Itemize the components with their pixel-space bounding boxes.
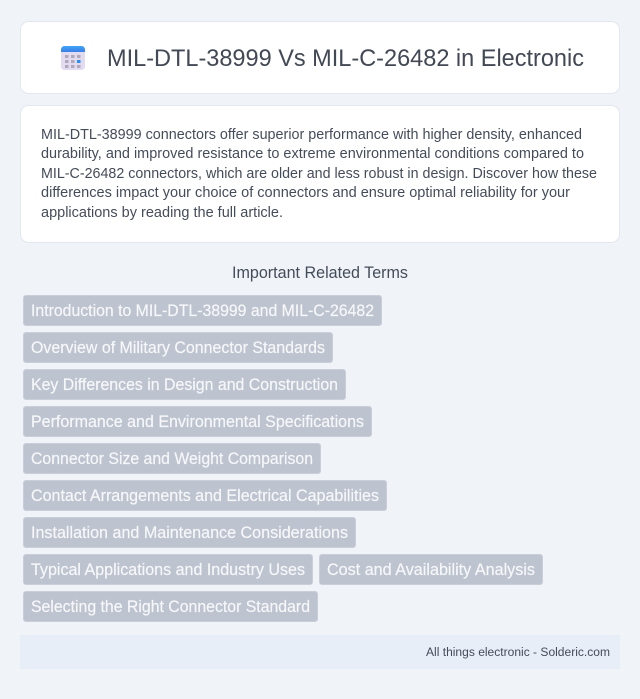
term tag: Overview of Military Connector Standards — [31, 339, 325, 357]
term tag — [24, 406, 372, 436]
summary text: applications by reading the full article. — [41, 205, 283, 221]
term tag — [24, 518, 356, 548]
panel: title header — [20, 22, 620, 94]
footer credit: All things electronic - Solderic.com — [426, 645, 610, 659]
summary text: durability, and improved resistance to extreme environmental conditions compared to — [41, 146, 584, 162]
term tag: Contact Arrangements and Electrical Capabilities — [31, 487, 379, 505]
term tag — [24, 592, 318, 622]
icon: calendar — [61, 46, 85, 70]
term tag — [24, 554, 312, 584]
term tag: Connector Size and Weight Comparison — [31, 450, 313, 468]
panel: summary — [20, 106, 620, 242]
term tag: Introduction to MIL-DTL-38999 and MIL-C-26482 — [31, 302, 374, 320]
term tag — [24, 370, 346, 400]
term tag: Cost and Availability Analysis — [327, 561, 535, 579]
summary text: differences impact your choice of connectors and ensure optimal reliability for your — [41, 185, 570, 201]
term tag — [24, 296, 382, 326]
term tag: Installation and Maintenance Considerations — [31, 524, 348, 542]
summary text — [41, 127, 597, 221]
term tag: Typical Applications and Industry Uses — [31, 561, 305, 579]
term tag — [24, 444, 320, 474]
list of related terms — [24, 296, 542, 622]
term tag: Selecting the Right Connector Standard — [31, 598, 310, 616]
summary text: MIL-C-26482 connectors, which are older and less robust in design. Discover how these — [41, 166, 597, 182]
term tag: Key Differences in Design and Construction — [31, 376, 338, 394]
heading: Important Related Terms: Important Related Terms — [232, 264, 408, 282]
term tag — [24, 480, 386, 510]
term tag — [320, 554, 542, 584]
title: MIL-DTL-38999 Vs MIL-C-26482 in Electronic — [107, 45, 584, 72]
term tag: Performance and Environmental Specifications — [31, 413, 364, 431]
summary text: MIL-DTL-38999 connectors offer superior performance with higher density, enhanced — [41, 127, 582, 143]
footer — [20, 635, 620, 669]
term tag — [24, 332, 332, 362]
